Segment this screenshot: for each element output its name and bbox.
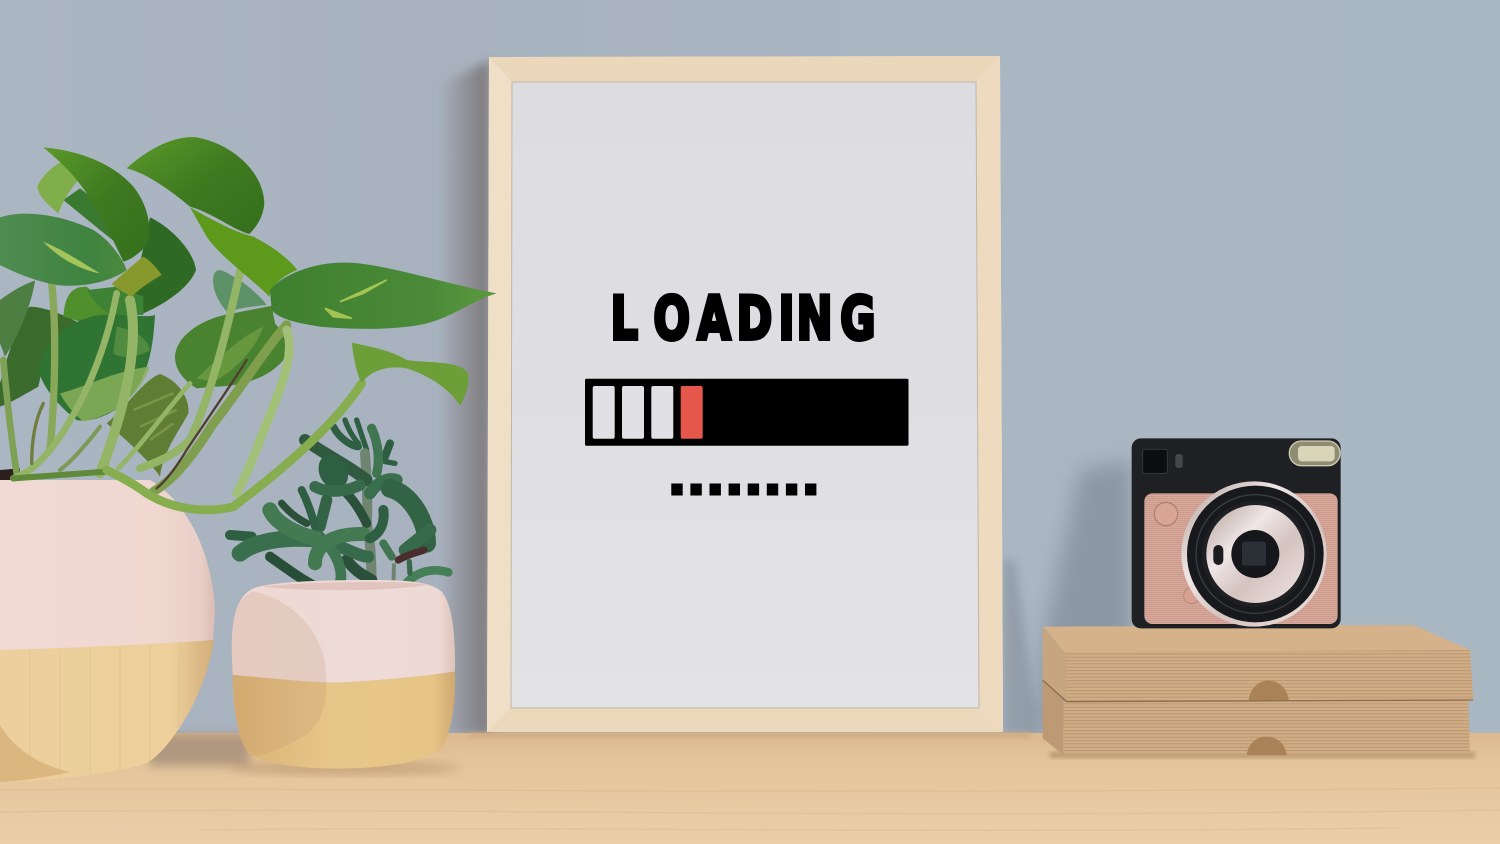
camera body [1132,438,1341,628]
frame top inner bevel [489,56,1000,82]
leaf: dark back [133,217,196,313]
top box lid [1043,625,1470,653]
leaf: left big [0,214,127,286]
right ceramic pot [232,580,455,769]
pink front panel [1144,493,1338,624]
seam between boxes [1043,680,1473,702]
stems [3,272,362,510]
leaf: inner dark [63,188,117,243]
leaf: far left [0,281,35,357]
camera and box shadow on wall [1035,460,1132,733]
table top [0,733,1500,844]
lower left facet shade [0,725,70,782]
top box front [1065,650,1473,702]
leaf: small right [352,343,469,406]
leaf: top big [127,137,264,234]
lower leaf stripes [133,393,177,440]
progress bar [585,379,908,446]
pot rim inner [263,582,427,590]
selfie mirror lights [1213,545,1223,565]
leaf: back left dark [0,307,80,407]
frame shadow on wall, left [440,60,490,735]
leaf: right big [270,263,497,329]
table grain lines [0,788,1500,830]
frame left side [487,57,512,732]
lens glass [1231,530,1279,578]
soil [0,468,20,480]
top box notch [1249,681,1289,701]
wood grain [30,643,180,778]
leaf: variegated [38,315,155,421]
leaf: top upper left [43,147,149,262]
pot wood base [0,640,214,782]
bottom box side [1043,677,1063,755]
pot wood base [233,672,455,769]
variegated highlight upper [113,327,150,357]
sensor slot [1175,454,1183,468]
frame shadow on wall, right [1003,560,1040,735]
bottom box notch [1247,737,1287,755]
left leaf highlight [43,242,100,273]
leaf: grey back [213,270,267,312]
variegated highlight [60,367,150,422]
leaf: inner lower [63,287,117,323]
shutter button [1154,502,1178,526]
stacked cardboard boxes [1043,625,1473,755]
instant camera [1132,438,1341,628]
shadows on table [140,732,1475,774]
dotted loading indicator [671,484,816,496]
white poster mat [511,82,979,708]
bottom box front [1063,698,1470,755]
leaf: pale top left [37,162,78,213]
pot shaded facet [232,592,326,755]
wooden frame [487,56,1003,732]
succulent plant [230,420,448,592]
frame bottom [487,708,1003,732]
viewfinder [1143,449,1167,473]
frame right side [976,56,1003,732]
lens silver disk [1206,505,1304,603]
leaf: centre right [175,306,286,388]
leaf: inner teal [87,287,143,315]
right leaf highlights [325,280,387,318]
leaf: under top [190,207,297,297]
pot pink glaze [232,580,455,683]
leaf highlight [197,327,263,382]
lens ring metal [1181,481,1327,627]
lens ring dark [1187,486,1324,622]
heading: LOADING: LOADING [610,284,876,354]
leaf: curled yellow [112,257,162,297]
picture frame with poster [487,56,1003,732]
pothos plant [0,137,497,510]
top box side [1043,627,1067,702]
secondary button [1184,588,1200,604]
pot pink glaze [0,480,215,651]
left ceramic pot [0,480,215,782]
leaf: lower olive [107,374,188,477]
flash [1289,441,1340,466]
